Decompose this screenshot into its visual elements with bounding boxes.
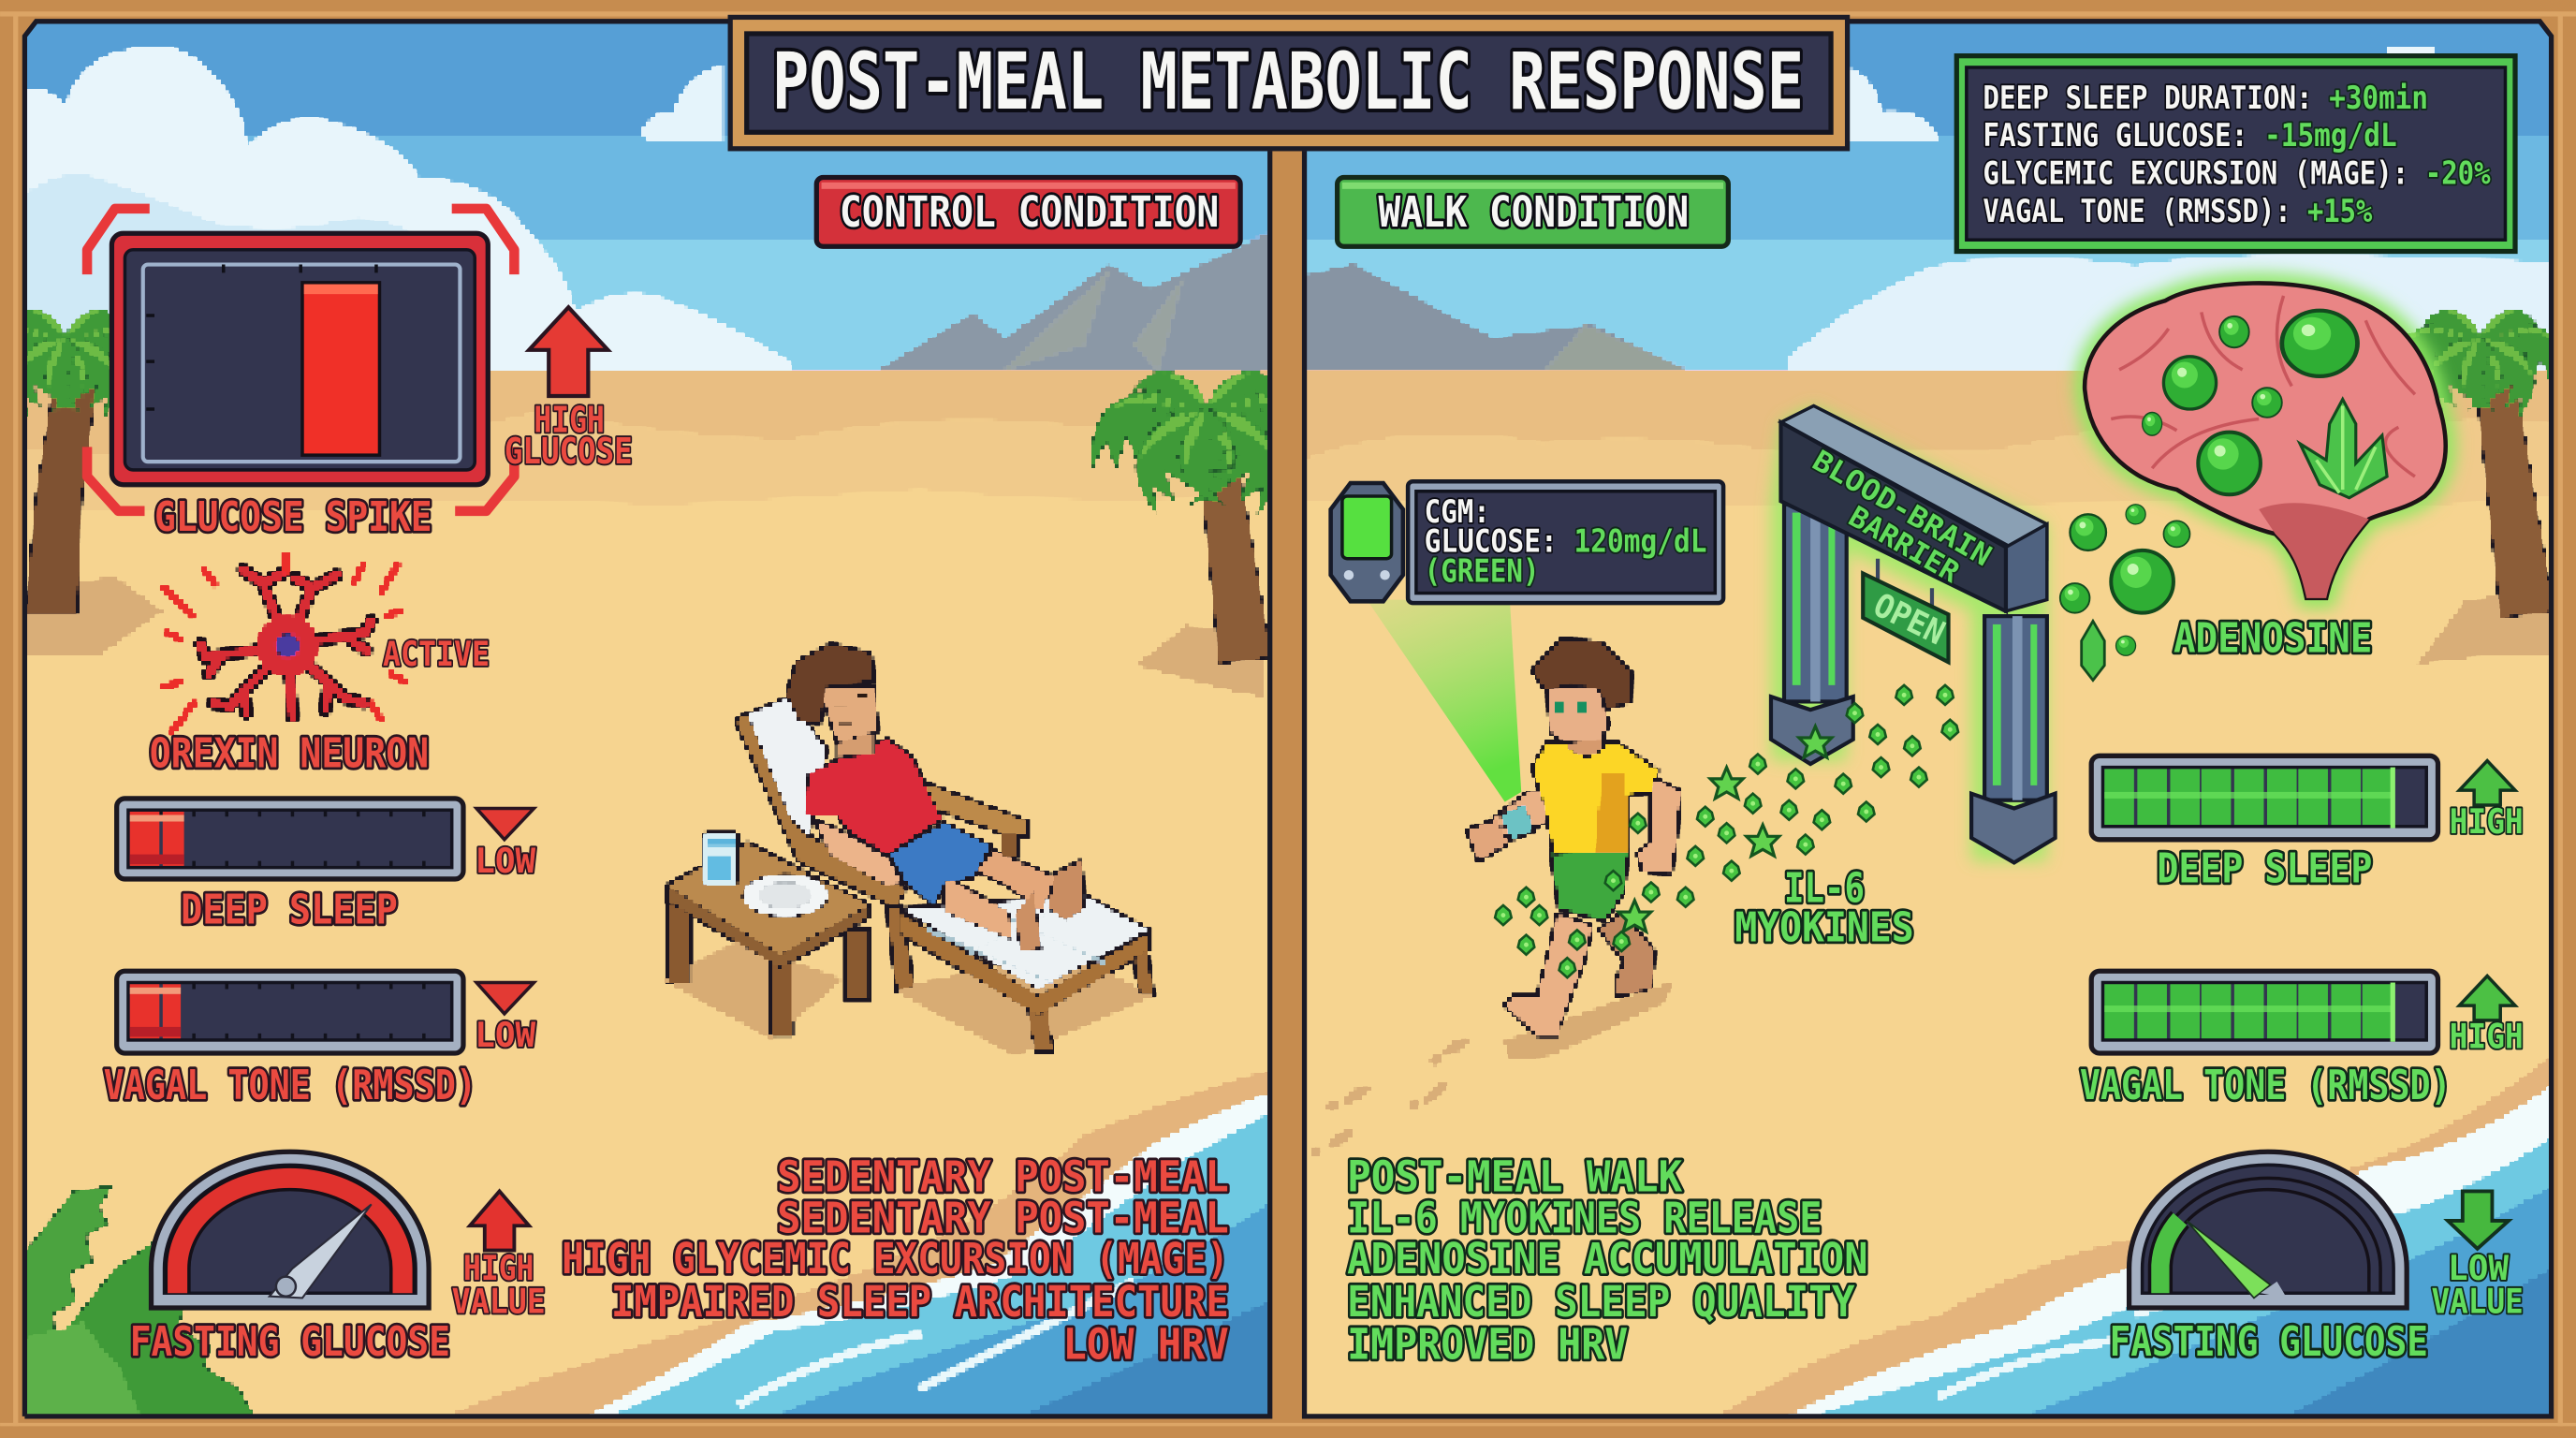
footprints <box>1310 1033 1473 1158</box>
table <box>668 905 869 1035</box>
arrow: high: HIGH <box>2450 1017 2524 1057</box>
summary list: control: SEDENTARY POST-MEAL <box>777 1193 1229 1242</box>
gauge bar: vagal tone low <box>117 971 463 1053</box>
arrow: high glucose <box>505 307 633 473</box>
open sign <box>1863 559 1951 662</box>
palm trunks <box>27 386 98 614</box>
il-6 myokine particles <box>1495 685 1958 977</box>
badge: control condition <box>816 178 1240 246</box>
CGM callout: (GREEN) <box>1425 552 1540 590</box>
summary list: walk <box>1347 1152 1868 1369</box>
title banner <box>728 15 1850 151</box>
label: deep sleep: DEEP SLEEP <box>2157 844 2372 892</box>
CGM callout: GLUCOSE: 120mg/dL <box>1425 523 1707 561</box>
arrow: high <box>2450 976 2524 1057</box>
gauge bar: deep sleep low <box>117 799 463 879</box>
arrow: low: LOW <box>475 841 536 881</box>
arrow: low value: VALUE <box>2431 1281 2524 1321</box>
clouds left <box>23 46 792 372</box>
arrow: low <box>475 983 536 1055</box>
label: deep sleep: DEEP SLEEP <box>181 886 398 933</box>
label: active: ACTIVE <box>383 634 490 674</box>
palm crowns <box>27 310 110 417</box>
summary list: control: IMPAIRED SLEEP ARCHITECTURE <box>611 1277 1229 1327</box>
arrow: high value <box>452 1191 546 1321</box>
gauge: fasting glucose low <box>2130 1152 2407 1308</box>
bottom-left palm leaves <box>27 1185 112 1340</box>
arrow: low value <box>2431 1191 2524 1321</box>
gate: blood-brain barrier <box>1771 405 2056 862</box>
badge: walk condition: WALK CONDITION <box>1379 187 1689 237</box>
label: glucose spike: GLUCOSE SPIKE <box>154 493 432 541</box>
arrow: high glucose: HIGH <box>534 400 605 442</box>
summary list: walk: POST-MEAL WALK <box>1347 1152 1683 1201</box>
illustration: person on lounger with table <box>664 644 1153 1055</box>
label: il-6 myokines: MYOKINES <box>1734 904 1914 952</box>
label: vagal tone: VAGAL TONE (RMSSD) <box>2080 1062 2452 1109</box>
badge: walk condition <box>1338 178 1728 246</box>
arrow: high value: VALUE <box>452 1281 546 1321</box>
stats panel: GLYCEMIC EXCURSION (MAGE): -20% <box>1983 155 2491 193</box>
arrow: high: HIGH <box>2450 801 2524 842</box>
arrow: low: LOW <box>475 1015 536 1055</box>
label: adenosine: ADENOSINE <box>2174 615 2372 663</box>
water right <box>1715 1051 2554 1416</box>
water left <box>444 1068 1273 1416</box>
arrow: high value: HIGH <box>463 1248 534 1288</box>
person <box>1048 861 1084 920</box>
mountains <box>874 230 1273 372</box>
stats panel: FASTING GLUCOSE: -15mg/dL <box>1983 117 2397 154</box>
open sign: OPEN <box>1867 586 1951 653</box>
summary list: walk: ENHANCED SLEEP QUALITY <box>1347 1277 1855 1327</box>
label: vagal tone: VAGAL TONE (RMSSD) <box>104 1062 476 1109</box>
gate sign text: BLOOD-BRAIN <box>1807 444 1998 573</box>
arrow: low <box>475 808 536 881</box>
gauge bar: vagal tone high <box>2091 971 2438 1053</box>
stats panel: VAGAL TONE (RMSSD): +15% <box>1983 193 2373 230</box>
icon: orexin neuron <box>165 553 406 731</box>
title text: POST-MEAL METABOLIC RESPONSE <box>772 36 1804 127</box>
illustration: walking person <box>1467 639 1680 1060</box>
gate: blood-brain barrier: BARRIER <box>1843 500 1966 590</box>
arrow: high <box>2450 761 2524 842</box>
arrow: low value: LOW <box>2448 1248 2510 1288</box>
sand bands <box>0 370 2576 1438</box>
stats panel <box>1956 56 2515 252</box>
summary list: walk: ADENOSINE ACCUMULATION <box>1347 1234 1868 1284</box>
panel: walk condition <box>1331 56 2524 1369</box>
summary list: walk: IMPROVED HRV <box>1347 1319 1628 1369</box>
chair <box>887 907 1153 1051</box>
panel: control condition <box>87 178 1240 1369</box>
icon: brain with adenosine <box>2060 283 2446 681</box>
chart: glucose spike <box>87 209 514 511</box>
summary list: control: LOW HRV <box>1063 1319 1229 1369</box>
gauge: fasting glucose high <box>152 1152 429 1308</box>
label: il-6 myokines <box>1734 865 1914 952</box>
badge: control condition: CONTROL CONDITION <box>840 187 1219 237</box>
summary list: walk: IL-6 MYOKINES RELEASE <box>1347 1193 1822 1242</box>
adenosine spheres <box>2282 311 2358 376</box>
summary list: control: HIGH GLYCEMIC EXCURSION (MAGE) <box>562 1234 1229 1284</box>
CGM callout <box>1331 481 1723 801</box>
label: il-6 myokines: IL-6 <box>1784 865 1865 913</box>
palm shadows <box>24 575 165 657</box>
label: fasting glucose: FASTING GLUCOSE <box>130 1318 450 1366</box>
summary list: control <box>562 1152 1229 1369</box>
summary list: control: SEDENTARY POST-MEAL <box>777 1152 1229 1201</box>
gauge bar: deep sleep high <box>2091 756 2438 840</box>
label: fasting glucose: FASTING GLUCOSE <box>2110 1318 2428 1366</box>
label: orexin neuron: OREXIN NEURON <box>150 730 429 778</box>
arrow: high glucose: GLUCOSE <box>505 431 633 473</box>
stats panel: DEEP SLEEP DURATION: +30min <box>1983 80 2428 117</box>
CGM callout: CGM: <box>1425 493 1490 531</box>
